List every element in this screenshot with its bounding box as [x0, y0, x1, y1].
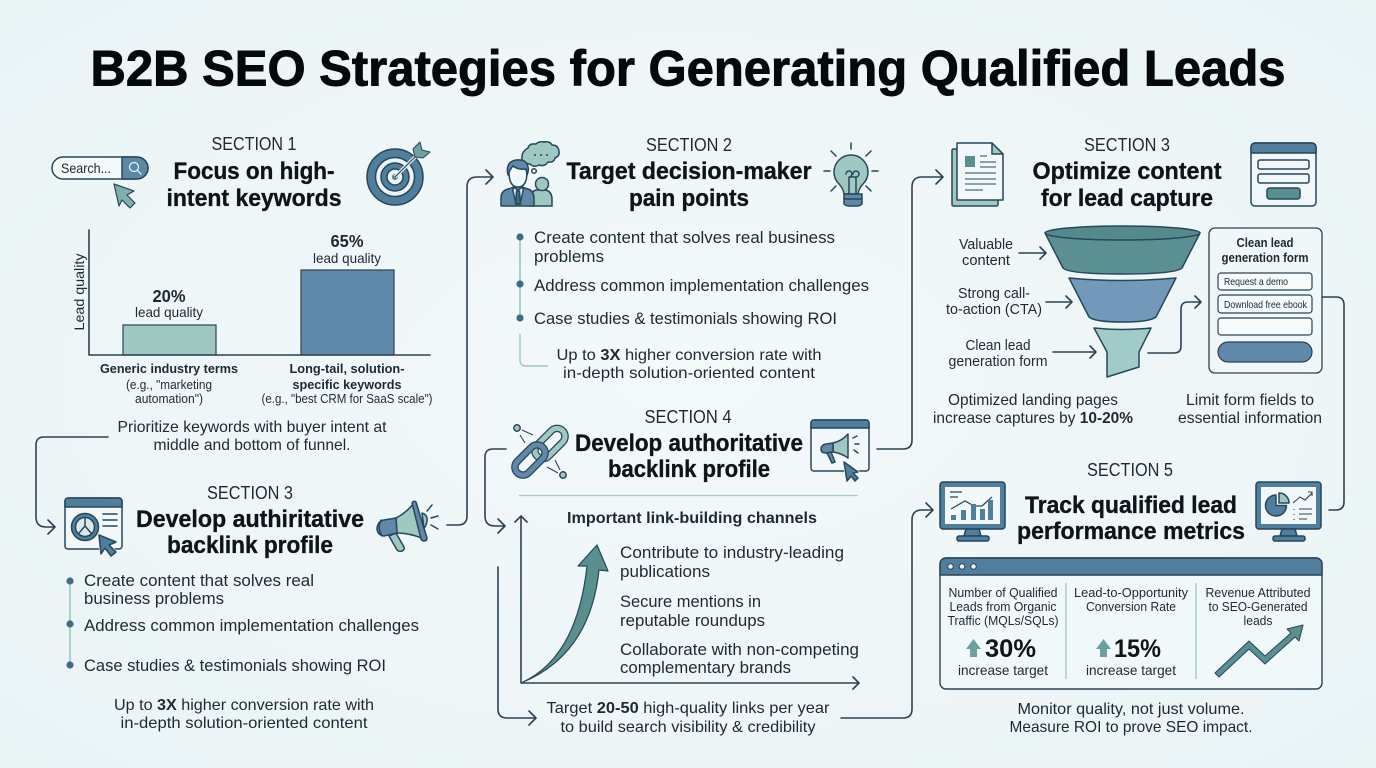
bar chart: lead quality: 65%	[330, 231, 364, 251]
stat text: to build search visibility & credibility	[560, 719, 816, 736]
caption: landing pages: Optimized landing pages	[948, 392, 1118, 409]
link-building channels chart: Contribute to industry-leading	[620, 544, 844, 562]
bar chart: lead quality: Lead quality	[71, 254, 87, 330]
icon: browser with megaphone	[811, 420, 869, 481]
metric: qualified leads: Traffic (MQLs/SQLs)	[948, 614, 1058, 628]
stat text: in-depth solution-oriented content	[563, 365, 816, 382]
heading	[1017, 492, 1245, 545]
panel: section 3 right content for lead capture	[933, 135, 1322, 427]
heading: Focus on high-	[174, 158, 334, 185]
bullet list: Case studies & testimonials showing ROI	[534, 310, 837, 328]
metric: qualified leads: increase target	[958, 662, 1048, 678]
bar chart: lead quality	[71, 230, 432, 406]
heading: Track qualified lead	[1025, 492, 1237, 519]
heading: Optimize content	[1032, 158, 1222, 185]
caption: landing pages: increase captures by 10-20%	[933, 410, 1133, 427]
caption: form fields: Limit form fields to	[1186, 392, 1314, 409]
funnel stage: valuable content	[1045, 233, 1200, 274]
funnel labels with arrows: Valuable	[959, 237, 1013, 253]
metric: lead-to-opportunity: 15%	[1114, 635, 1161, 663]
caption: landing pages	[933, 392, 1133, 427]
bar: long-tail keywords	[301, 270, 394, 355]
arrow: lower-left section to section 2	[447, 170, 493, 525]
bullet list: Create content that solves real business	[534, 229, 835, 247]
stat text: Up to 3X higher conversion rate with	[114, 697, 374, 714]
link-building channels chart: Important link-building channels	[567, 510, 817, 527]
icon: people with thought bubble	[501, 142, 559, 206]
caption: monitor quality: Monitor quality, not just volume.	[1018, 701, 1244, 718]
heading: backlink profile	[608, 456, 770, 483]
metric: lead-to-opportunity	[1074, 586, 1189, 678]
takeaway text	[118, 419, 387, 454]
title: B2B SEO Strategies for Generating Qualified Leads	[90, 40, 1286, 96]
stat text: in-depth solution-oriented content	[120, 715, 368, 732]
metric: qualified leads: Leads from Organic	[950, 600, 1056, 614]
link-building channels chart: Collaborate with non-competing	[620, 641, 859, 659]
heading: performance metrics	[1017, 518, 1245, 545]
heading: Develop authiritative	[136, 506, 364, 533]
arrow: funnel to form	[1148, 296, 1201, 353]
bar chart: lead quality: 20%	[152, 286, 186, 306]
form card: Request a demo	[1224, 276, 1288, 288]
funnel labels with arrows: content	[962, 253, 1010, 269]
heading	[166, 158, 342, 212]
panel: section 1 high-intent keywords	[52, 134, 432, 454]
link-building channels chart	[515, 510, 859, 689]
icon: search bar	[52, 157, 148, 208]
stat text	[556, 347, 822, 382]
panel: section 5 metrics	[940, 460, 1322, 736]
arrow: form to section 5	[1322, 297, 1344, 510]
bullet list: Create content that solves real	[84, 572, 314, 590]
heading	[136, 506, 364, 559]
icon: megaphone	[377, 501, 438, 551]
icon: target	[367, 142, 430, 205]
funnel	[1045, 226, 1200, 377]
section label: SECTION 5	[1087, 460, 1173, 480]
heading: backlink profile	[167, 532, 333, 559]
heading	[575, 430, 803, 483]
link-building channels chart: Secure mentions in	[620, 593, 761, 611]
link-building channels chart: complementary brands	[620, 659, 791, 677]
metric: lead-to-opportunity: increase target	[1086, 662, 1176, 678]
form card: Clean lead	[1236, 236, 1294, 250]
stat text	[114, 697, 374, 732]
metric: revenue: to SEO-Generated	[1208, 600, 1308, 614]
bar chart: lead quality: (e.g., "best CRM for SaaS scale")	[262, 392, 432, 406]
caption: monitor quality: Measure ROI to prove SEO impact.	[1010, 719, 1252, 736]
heading: intent keywords	[166, 185, 342, 212]
section label: SECTION 2	[646, 135, 732, 155]
metrics dashboard	[940, 558, 1322, 689]
section label: SECTION 3	[207, 483, 293, 503]
icon: chain link	[512, 425, 568, 478]
stat text	[546, 700, 830, 736]
link-building channels chart: publications	[620, 563, 710, 581]
caption: form fields: essential information	[1178, 410, 1322, 427]
heading: Develop authoritative	[575, 430, 803, 457]
bullet list	[66, 572, 419, 675]
metric: revenue	[1206, 586, 1311, 677]
icon: browser with cursor	[65, 498, 122, 556]
divider	[519, 494, 858, 496]
funnel labels with arrows: Clean lead	[966, 338, 1030, 354]
stat text: Up to 3X higher conversion rate with	[556, 347, 822, 364]
metric: qualified leads: 30%	[985, 635, 1036, 663]
form card: Download free ebook	[1224, 299, 1308, 311]
heading	[566, 158, 812, 212]
icon: document	[952, 143, 1003, 206]
metric: revenue: leads	[1244, 614, 1272, 628]
heading	[1032, 158, 1222, 212]
bullet list: problems	[534, 248, 604, 266]
caption: form fields	[1178, 392, 1322, 427]
arrow: section 4 heading to chart	[485, 449, 506, 533]
bar: generic terms	[123, 325, 216, 355]
funnel labels with arrows	[946, 237, 1096, 370]
bar chart: lead quality: Long-tail, solution-	[290, 361, 404, 376]
bar chart: lead quality: specific keywords	[292, 377, 402, 392]
bar chart: lead quality: lead quality	[313, 250, 381, 266]
bullet list: Case studies & testimonials showing ROI	[84, 657, 386, 675]
bullet list: business problems	[84, 590, 224, 608]
form card: generation form	[1222, 251, 1308, 265]
icon: form window	[1251, 143, 1316, 206]
metric: revenue: Revenue Attributed	[1206, 586, 1311, 600]
bar chart: lead quality: (e.g., "marketing	[126, 378, 212, 392]
metric: lead-to-opportunity: Lead-to-Opportunity	[1074, 586, 1189, 600]
form card	[1209, 228, 1322, 373]
bullet list	[516, 229, 869, 366]
heading: Target decision-maker	[566, 158, 812, 185]
metric: qualified leads	[948, 586, 1058, 678]
arrow: section 4 to section 3 right	[877, 170, 943, 449]
panel: section 2 decision-maker pain points	[501, 135, 878, 382]
panel: section 4 authoritative backlink profile	[512, 407, 869, 736]
section label: SECTION 3	[1084, 135, 1170, 155]
bar chart: lead quality: Generic industry terms	[100, 361, 238, 376]
caption: monitor quality	[1010, 701, 1252, 736]
bullet list: Address common implementation challenges	[534, 277, 869, 295]
funnel stage: strong CTA	[1069, 278, 1176, 322]
funnel labels with arrows: Strong call-	[958, 286, 1030, 302]
section label: SECTION 1	[212, 134, 296, 154]
funnel stage: clean form	[1094, 328, 1151, 377]
section label: SECTION 4	[644, 407, 732, 427]
bar chart: lead quality: lead quality	[135, 304, 203, 320]
bullet list: Address common implementation challenges	[84, 617, 419, 635]
bar chart: lead quality: automation")	[135, 392, 203, 406]
icon: search bar: Search...	[61, 160, 111, 176]
takeaway text: middle and bottom of funnel.	[154, 437, 350, 454]
panel: section 3 left backlink profile	[65, 483, 438, 732]
arrow: section 1 to lower-left section	[36, 437, 108, 534]
stat text: Target 20-50 high-quality links per year	[546, 700, 830, 717]
link-building channels chart: reputable roundups	[620, 612, 765, 630]
icon: monitor with bar chart	[940, 482, 1005, 541]
arrow: target text to section 5	[841, 503, 933, 718]
heading: pain points	[629, 185, 749, 212]
arrow: chart to target text	[498, 567, 536, 725]
funnel labels with arrows: generation form	[948, 354, 1048, 370]
metric: qualified leads: Number of Qualified	[948, 586, 1058, 600]
icon: monitor with pie chart	[1256, 482, 1321, 541]
funnel labels with arrows: to-action (CTA)	[946, 302, 1042, 318]
metric: lead-to-opportunity: Conversion Rate	[1086, 600, 1176, 614]
icon: lightbulb	[824, 143, 878, 206]
takeaway text: Prioritize keywords with buyer intent at	[118, 419, 387, 436]
growth arrow	[521, 545, 608, 683]
heading: for lead capture	[1041, 185, 1213, 212]
